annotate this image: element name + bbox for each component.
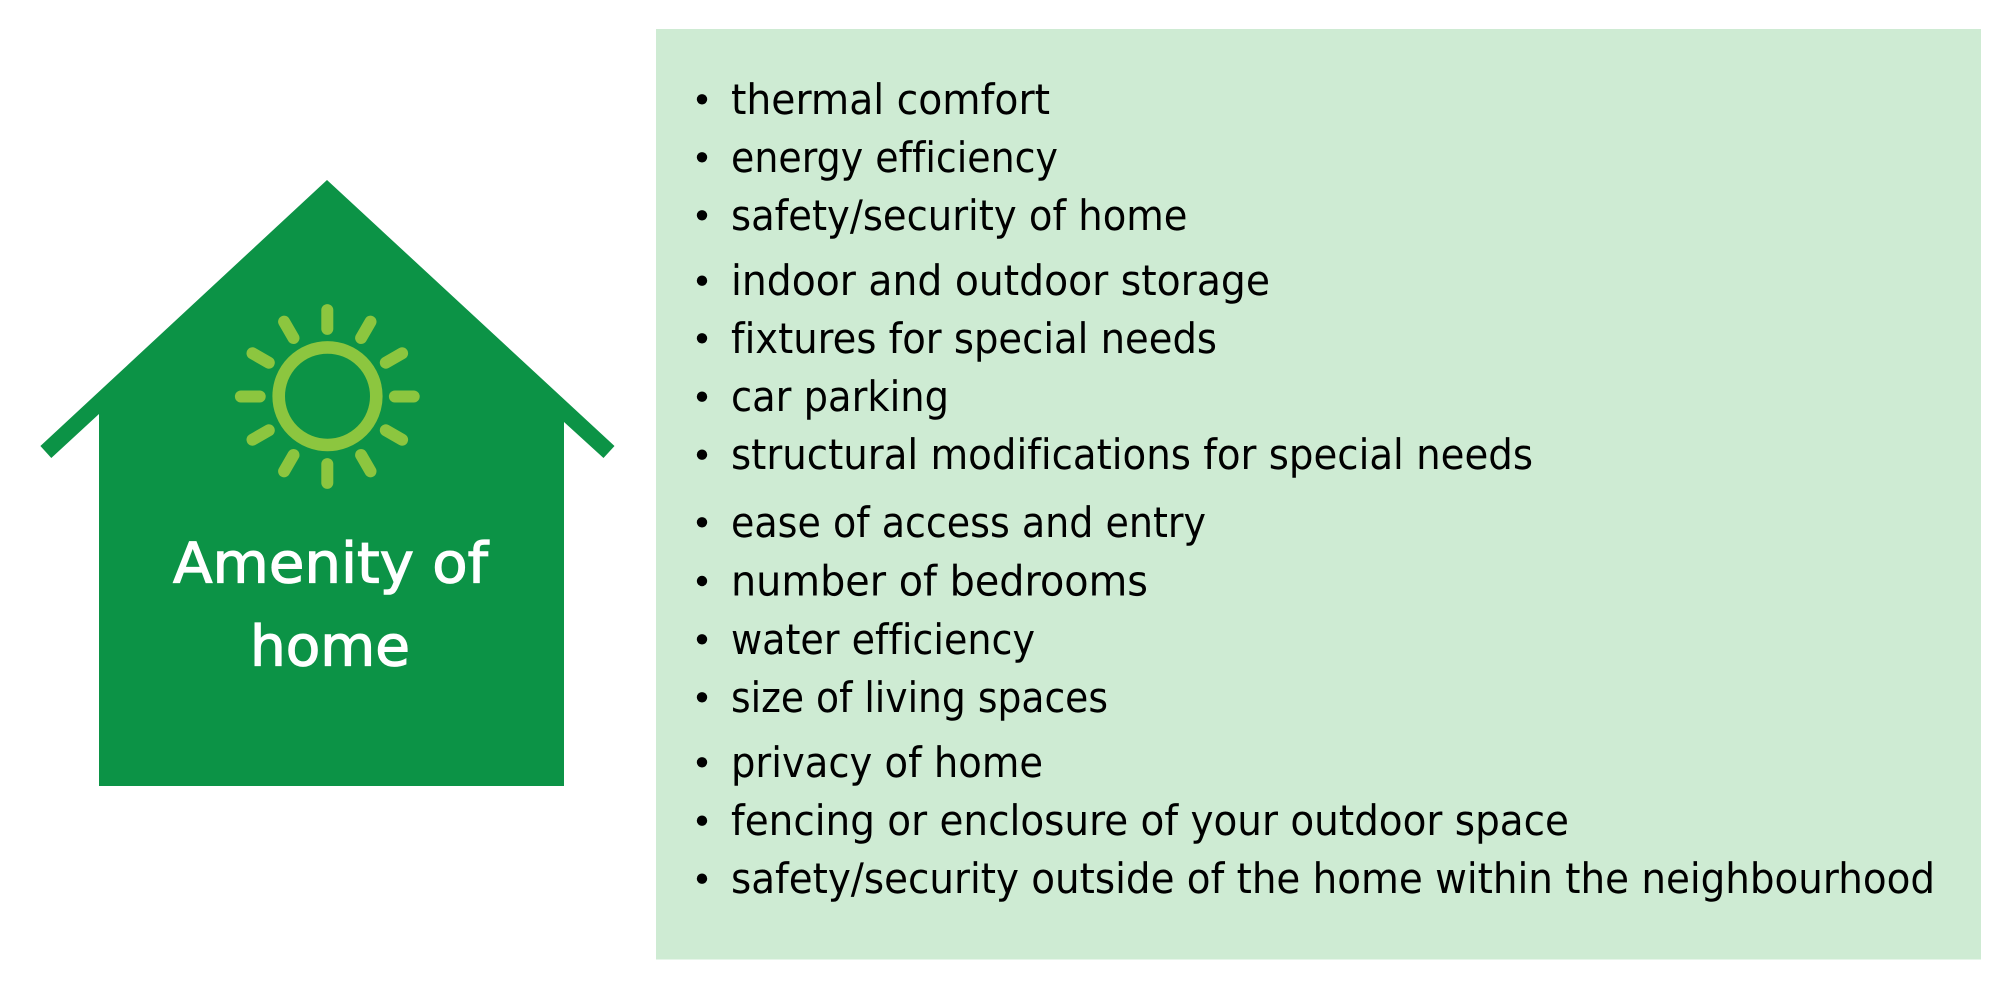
item: indoor and outdoor storage: indoor and outdoor storage (731, 256, 1270, 305)
panel: amenity list (656, 29, 1981, 960)
item: privacy of home: privacy of home (731, 738, 1043, 787)
item: thermal comfort: thermal comfort (731, 75, 1050, 124)
item: safety/security outside of the home within the neighbourhood: safety/security outside of the home within the neighbourhood (731, 854, 1935, 903)
panel: amenity house (40, 180, 614, 786)
item: size of living spaces: size of living spaces (731, 673, 1108, 722)
heading: Amenity of home: home (250, 614, 410, 679)
item: energy efficiency: energy efficiency (731, 133, 1058, 182)
item: fencing or enclosure of your outdoor space: fencing or enclosure of your outdoor space (731, 796, 1569, 845)
list group: access and size (697, 498, 1206, 722)
heading: Amenity of home: Amenity of (173, 531, 489, 596)
heading: Amenity of home (173, 531, 489, 679)
panel background (656, 29, 1981, 960)
list group: storage and fittings (697, 256, 1533, 479)
icon: sun (241, 310, 414, 483)
list group: privacy and neighbourhood (697, 738, 1935, 903)
item: number of bedrooms: number of bedrooms (731, 556, 1148, 606)
item: fixtures for special needs: fixtures for special needs (731, 314, 1217, 363)
item: structural modifications for special needs: structural modifications for special needs (731, 430, 1533, 479)
house shape (40, 180, 614, 786)
item: ease of access and entry: ease of access and entry (731, 498, 1206, 547)
item: safety/security of home: safety/security of home (731, 191, 1188, 240)
list group: comfort and safety (697, 75, 1188, 240)
item: car parking: car parking (731, 372, 949, 421)
item: water efficiency: water efficiency (731, 615, 1035, 664)
